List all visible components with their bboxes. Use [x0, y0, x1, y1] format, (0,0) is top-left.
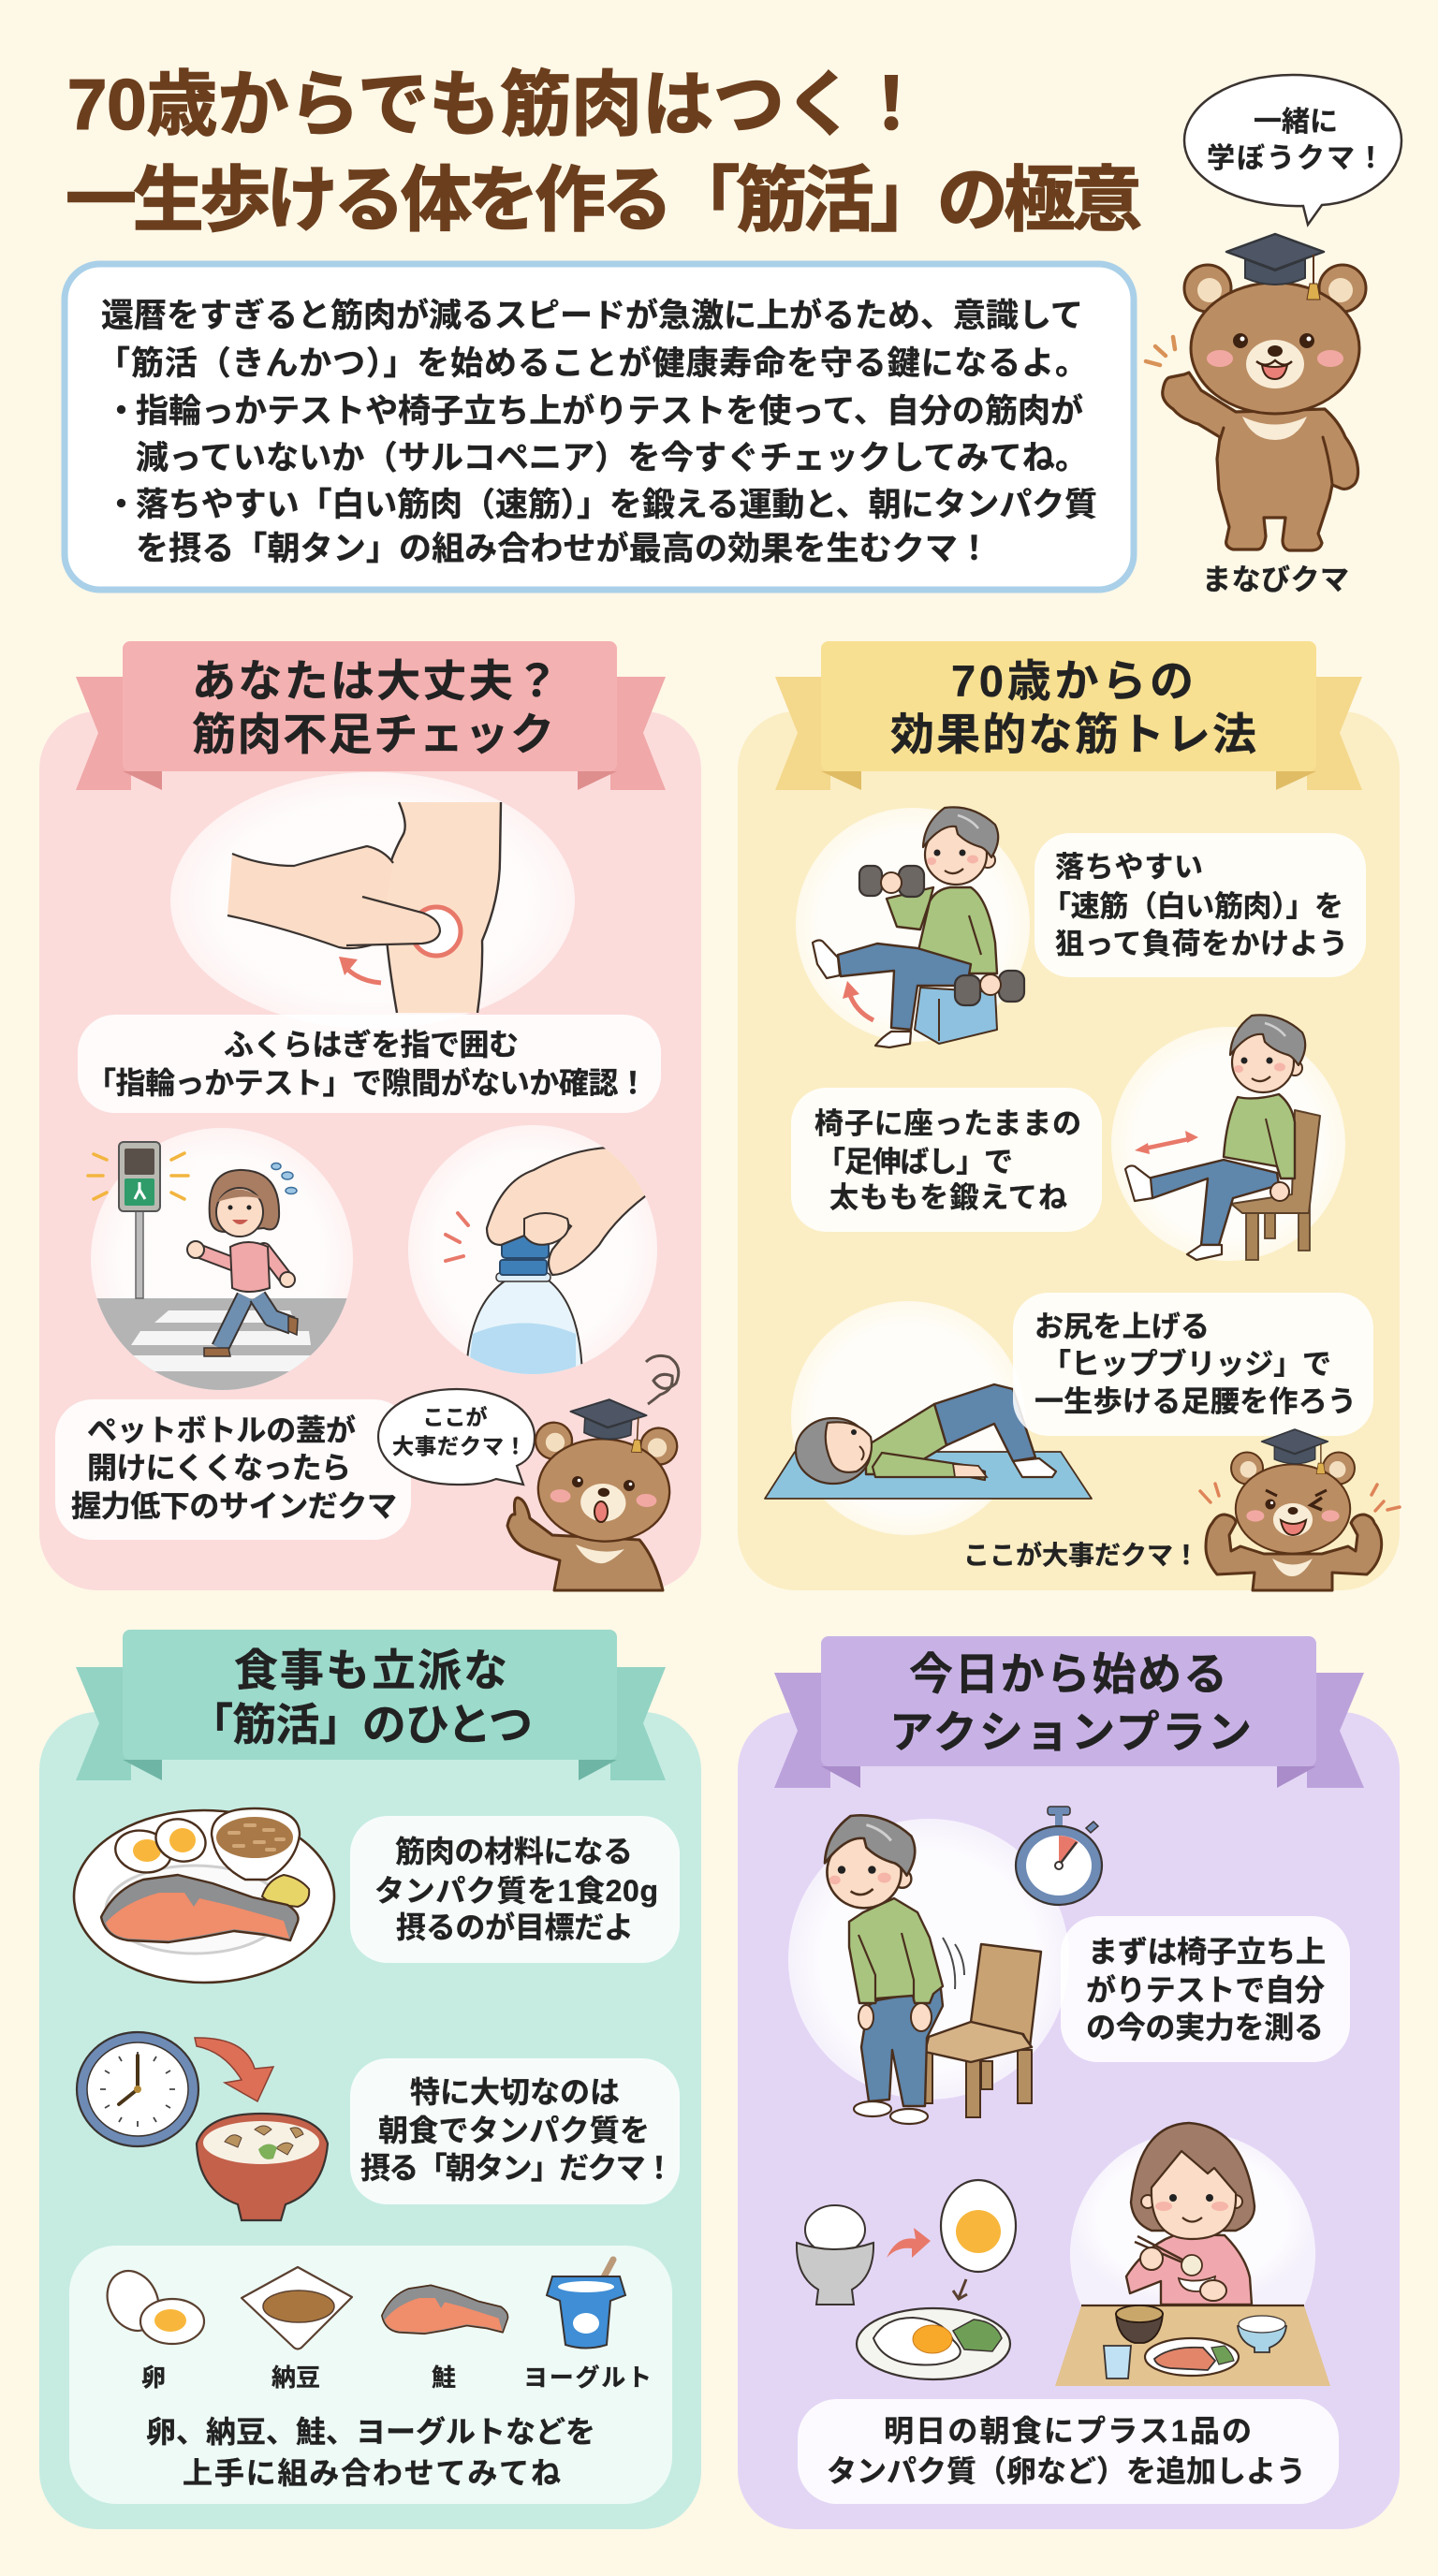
speech bubble: bear invitation: 学ぼうクマ！: [1207, 143, 1385, 174]
ribbon heading: muscle check: [76, 641, 666, 790]
caption: chair stand: まずは椅子立ち上: [1088, 1935, 1326, 1969]
ribbon heading: action plan: 今日から始める: [909, 1649, 1227, 1699]
food labels: ヨーグルト: [523, 2364, 652, 2392]
speech bubble: this matters: ここが: [423, 1405, 487, 1429]
caption: add one protein item: [798, 2399, 1339, 2504]
food labels: [141, 2364, 652, 2392]
title: 70歳からでも筋肉はつく！: [67, 66, 927, 145]
icon: natto pack: [242, 2267, 352, 2349]
caption: grip strength: 開けにくくなったら: [87, 1451, 351, 1485]
illustration: clock to breakfast bowl: [77, 2032, 328, 2220]
mascot: flexing bear: [1200, 1429, 1400, 1590]
mascot: manabi bear: まなびクマ: [1202, 564, 1349, 596]
panel: intro summary: 「筋活（きんかつ）」を始めることが健康寿命を守る鍵になるよ。: [97, 345, 1088, 382]
mascot: manabi bear: [1146, 234, 1366, 596]
speech bubble: this matters: [378, 1389, 535, 1485]
illustration: opening a bottle: [408, 1125, 674, 1376]
panel: intro summary: ・: [105, 487, 138, 523]
caption: morning protein: 摂る「朝タン」だクマ！: [360, 2151, 674, 2185]
caption: chair stand: の今の実力を測る: [1086, 2011, 1324, 2044]
caption: protein goal: [350, 1816, 680, 1963]
ribbon heading: muscle check: あなたは大丈夫？: [192, 656, 559, 706]
caption: protein goal: タンパク質を1食20g: [374, 1874, 658, 1908]
caption: finger ring test: 「指輪っかテスト」で隙間がないか確認！: [86, 1066, 648, 1100]
ribbon heading: muscle check: 筋肉不足チェック: [192, 710, 554, 759]
ribbon heading: training: [775, 641, 1362, 790]
title: [66, 66, 1142, 241]
ribbon heading: action plan: [774, 1636, 1364, 1788]
panel: muscle check: [39, 641, 701, 1590]
card: protein foods: [69, 2246, 672, 2504]
icon: salmon: [382, 2285, 508, 2334]
caption: add one protein item: タンパク質（卵など）を追加しよう: [827, 2454, 1306, 2488]
caption: fast-twitch: 「速筋（白い筋肉）」を: [1042, 890, 1343, 923]
ribbon heading: meals: 「筋活」のひとつ: [189, 1700, 533, 1749]
caption: hip bridge: お尻を上げる: [1034, 1310, 1210, 1343]
ribbon heading: training: 効果的な筋トレ法: [890, 710, 1256, 759]
ribbon heading: training: 70歳からの: [951, 656, 1194, 706]
caption: chair stand: [1061, 1916, 1350, 2062]
caption: hip bridge: 一生歩ける足腰を作ろう: [1034, 1385, 1357, 1418]
icon: yogurt: [547, 2260, 625, 2348]
caption: fast-twitch: [1034, 833, 1366, 977]
illustration: stopwatch: [1016, 1807, 1102, 1905]
ribbon heading: action plan: アクションプラン: [889, 1707, 1252, 1757]
caption: protein goal: 摂るのが目標だよ: [396, 1910, 634, 1944]
illustration: seated leg extension: [1111, 1015, 1345, 1261]
illustration: finger ring test on calf: [170, 772, 575, 1029]
illustration: woman eating breakfast: [1055, 2123, 1330, 2386]
illustration: rice to egg to plate: [797, 2180, 1016, 2379]
panel: action plan: [738, 1636, 1400, 2529]
panel: intro summary: 落ちやすい「白い筋肉（速筋）」を鍛える運動と、朝にタンパク質: [136, 487, 1097, 523]
panel: meals: [39, 1630, 701, 2529]
panel: training methods: [738, 641, 1400, 1590]
mascot: pointing bear: [507, 1355, 679, 1590]
note: this matters: ここが大事だクマ！: [963, 1540, 1199, 1570]
caption: add one protein item: 明日の朝食にプラス1品の: [884, 2414, 1252, 2448]
panel: intro summary: 指輪っかテストや椅子立ち上がりテストを使って、自分の筋肉が: [136, 393, 1083, 430]
food labels: 納豆: [271, 2364, 320, 2392]
caption: leg extension: 「足伸ばし」で: [816, 1146, 1013, 1178]
caption: combine foods: 卵、納豆、鮭、ヨーグルトなどを: [146, 2415, 595, 2449]
illustration: protein plate: [74, 1808, 334, 1983]
panel: intro summary: 減っていないか（サルコペニア）を今すぐチェックしてみてね。: [136, 440, 1088, 476]
food labels: 卵: [141, 2364, 166, 2392]
title: 一生歩ける体を作る「筋活」の極意: [66, 161, 1142, 241]
caption: leg extension: 太ももを鍛えてね: [829, 1181, 1067, 1214]
speech bubble: bear invitation: 一緒に: [1254, 107, 1338, 138]
caption: hip bridge: 「ヒップブリッジ」で: [1042, 1348, 1331, 1381]
icon: egg: [97, 2262, 204, 2344]
panel: intro summary: ・: [105, 393, 138, 430]
ribbon heading: meals: 食事も立派な: [234, 1646, 507, 1695]
caption: protein goal: 筋肉の材料になる: [395, 1835, 633, 1868]
illustration: seated leg raise with dumbbells: [796, 807, 1030, 1047]
panel: intro summary: を摂る「朝タン」の組み合わせが最高の効果を生むクマ！: [136, 531, 990, 567]
illustration: chair stand test: [788, 1815, 1069, 2124]
ribbon heading: meals: [76, 1630, 666, 1780]
illustration: crossing at green light: [84, 1128, 365, 1392]
caption: morning protein: 朝食でタンパク質を: [378, 2114, 650, 2147]
food labels: 鮭: [432, 2364, 456, 2392]
caption: fast-twitch: 狙って負荷をかけよう: [1055, 928, 1348, 960]
panel: intro summary: 還暦をすぎると筋肉が減るスピードが急激に上がるため、意識して: [101, 298, 1083, 334]
caption: grip strength: 握力低下のサインだクマ: [71, 1489, 397, 1523]
caption: hip bridge: [1013, 1293, 1373, 1436]
caption: fast-twitch: 落ちやすい: [1055, 851, 1203, 884]
caption: combine foods: 上手に組み合わせてみてね: [183, 2456, 561, 2490]
caption: chair stand: がりテストで自分: [1086, 1973, 1325, 2007]
caption: leg extension: 椅子に座ったままの: [814, 1107, 1081, 1140]
caption: grip strength: [55, 1399, 411, 1540]
caption: finger ring test: ふくらはぎを指で囲む: [224, 1028, 519, 1061]
speech bubble: bear invitation: [1184, 75, 1401, 225]
caption: morning protein: 特に大切なのは: [410, 2075, 620, 2109]
panel: intro summary: [65, 264, 1134, 590]
caption: leg extension: [791, 1088, 1102, 1232]
speech bubble: this matters: 大事だクマ！: [392, 1434, 526, 1458]
caption: grip strength: ペットボトルの蓋が: [87, 1413, 356, 1447]
caption: finger ring test: [78, 1015, 661, 1113]
illustration: hip bridge: [765, 1301, 1092, 1535]
caption: combine foods: [146, 2415, 595, 2490]
caption: morning protein: [350, 2058, 680, 2204]
